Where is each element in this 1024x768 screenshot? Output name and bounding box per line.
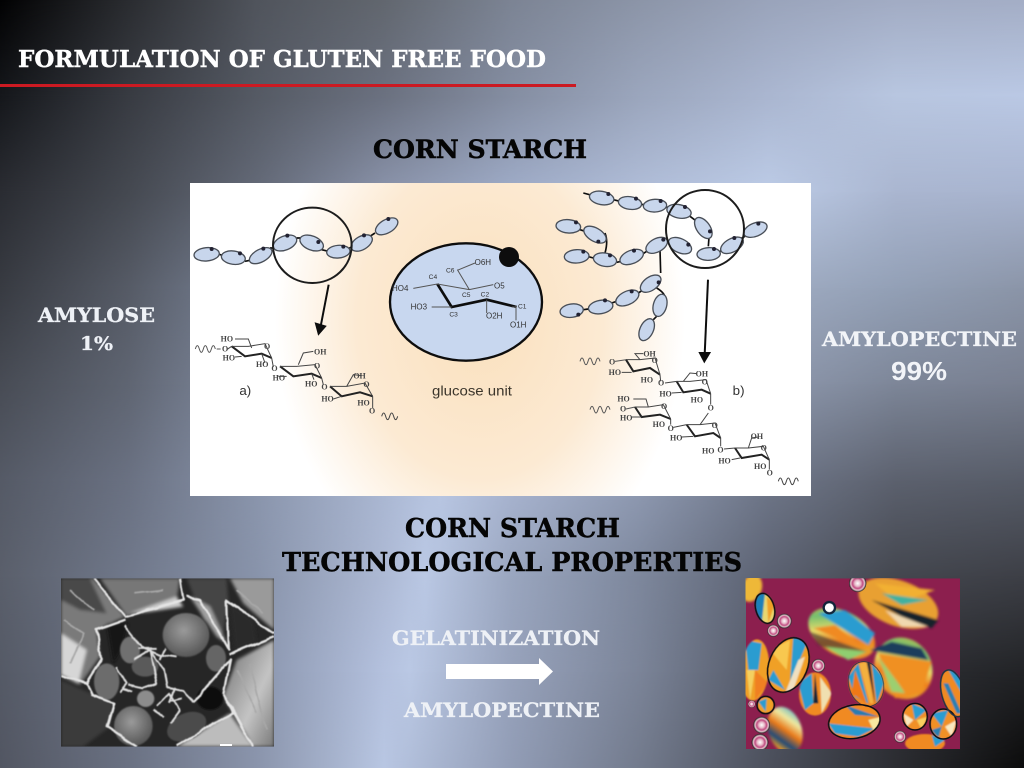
glucose disc: HO3 bbox=[411, 303, 428, 312]
glucose disc: HO4 bbox=[392, 284, 409, 293]
amylopectin formula: OH bbox=[696, 369, 709, 378]
amylopectin formula: HO bbox=[617, 395, 630, 404]
photo: polarised light micrograph of starch granules bbox=[746, 578, 960, 749]
heading: corn starch: CORN STARCH bbox=[373, 135, 587, 164]
amylose formula: O bbox=[264, 342, 270, 351]
title: FORMULATION OF GLUTEN FREE FOOD bbox=[18, 45, 546, 73]
amylose formula: HO bbox=[321, 395, 334, 404]
amylopectin bead chains bbox=[555, 189, 769, 343]
text: glucose unit: glucose unit bbox=[432, 383, 512, 399]
amylose formula bbox=[195, 335, 398, 420]
glucose disc: C4 bbox=[429, 274, 437, 281]
amylopectin formula: HO bbox=[609, 368, 621, 377]
amylose formula: OH bbox=[353, 371, 367, 380]
amylopectin formula: O bbox=[668, 424, 674, 433]
amylopectin formula: O bbox=[761, 444, 767, 453]
amylopectin formula: O bbox=[652, 356, 658, 365]
magnifier circle bbox=[666, 190, 744, 268]
photo: electron micrograph of starch granules bbox=[61, 578, 274, 747]
amylopectin formula: O bbox=[767, 469, 773, 478]
cell wall ridges bbox=[61, 578, 274, 747]
amylose formula: HO bbox=[221, 335, 233, 344]
glucose disc right part bbox=[510, 303, 527, 330]
heading: corn starch technological properties: CORN STARCH bbox=[405, 514, 620, 544]
amylose formula: HO bbox=[273, 373, 285, 382]
glucose disc: C2 bbox=[481, 291, 489, 298]
label: amylose 1%: AMYLOSE bbox=[37, 303, 155, 327]
arrow bbox=[700, 280, 709, 361]
glucose disc: C6 bbox=[446, 267, 455, 274]
glucose disc: C5 bbox=[462, 292, 471, 299]
amylose formula: O bbox=[363, 380, 370, 389]
amylose bead chain bbox=[193, 214, 401, 267]
amylopectin formula: HO bbox=[641, 375, 653, 384]
amylopectin formula: HO bbox=[702, 447, 714, 456]
amylopectin formula: HO bbox=[754, 462, 766, 471]
amylopectin formula: O bbox=[661, 402, 667, 411]
outlined granules with wedge patterns bbox=[746, 592, 960, 749]
arrow bbox=[316, 285, 329, 334]
amylopectin formula: O bbox=[702, 378, 708, 387]
amylopectin formula: O bbox=[620, 405, 626, 414]
amylopectin chain and molecule bbox=[510, 189, 798, 485]
amylopectin formula: HO bbox=[670, 433, 682, 442]
label: gelatinization: GELATINIZATION bbox=[392, 626, 600, 650]
label: amylose 1%: 1% bbox=[80, 333, 113, 355]
amylose formula: HO bbox=[305, 379, 317, 388]
label: amylose 1% bbox=[37, 303, 155, 355]
amylopectin formula bbox=[580, 349, 798, 485]
amylose formula: O bbox=[314, 361, 320, 370]
amylopectin formula: O bbox=[609, 357, 615, 366]
birefringent crosses on large granules bbox=[810, 583, 938, 698]
small ring granules bbox=[748, 575, 906, 751]
heading: corn starch technological properties bbox=[282, 514, 742, 578]
magnifier circle bbox=[273, 208, 352, 283]
glucose disc: O6H bbox=[475, 258, 491, 267]
label: amylopectine 99%: 99% bbox=[891, 356, 947, 386]
amylopectin formula: O bbox=[708, 404, 714, 413]
amylose chain and molecule bbox=[193, 208, 542, 420]
amylose formula: HO bbox=[256, 360, 268, 369]
text: a: a) bbox=[239, 383, 251, 398]
panel: starch structure diagram bbox=[190, 183, 811, 496]
amylopectin formula: HO bbox=[620, 413, 632, 422]
amylose formula: O bbox=[222, 344, 228, 353]
amylopectin formula: OH bbox=[751, 432, 764, 441]
glucose disc: C3 bbox=[449, 311, 458, 318]
amylose formula: O bbox=[369, 407, 375, 416]
glucose disc bbox=[390, 243, 542, 361]
amylopectin formula: HO bbox=[718, 457, 731, 466]
amylopectin formula: O bbox=[658, 379, 664, 388]
amylopectin formula: HO bbox=[659, 389, 672, 398]
amylose formula: O bbox=[271, 364, 278, 373]
amylose formula: OH bbox=[314, 347, 327, 356]
glucose disc: O5 bbox=[494, 281, 505, 290]
amylopectin formula: O bbox=[717, 445, 724, 454]
glucose disc: O2H bbox=[486, 311, 503, 320]
glucose disc right part: C1 bbox=[518, 303, 527, 310]
arrow: gelatinization to amylopectine bbox=[446, 658, 553, 685]
amylopectin formula: O bbox=[712, 421, 718, 430]
amylopectin formula: OH bbox=[643, 349, 657, 358]
amylopectin formula: HO bbox=[691, 395, 703, 404]
label: amylopectine 99% bbox=[821, 327, 1017, 386]
text: b: b) bbox=[733, 383, 745, 398]
amylose formula: HO bbox=[223, 354, 235, 363]
red title rule bbox=[0, 84, 576, 87]
label: amylopectine: AMYLOPECTINE bbox=[403, 698, 600, 722]
amylose formula: HO bbox=[357, 399, 370, 408]
amylopectin formula: HO bbox=[653, 420, 665, 429]
heading: corn starch technological properties: TECHNOLOGICAL PROPERTIES bbox=[282, 548, 742, 578]
glucose disc right part: O1H bbox=[510, 321, 527, 330]
label: amylopectine 99%: AMYLOPECTINE bbox=[821, 327, 1017, 351]
scale bar bbox=[220, 744, 232, 746]
amylose formula: O bbox=[321, 383, 328, 392]
